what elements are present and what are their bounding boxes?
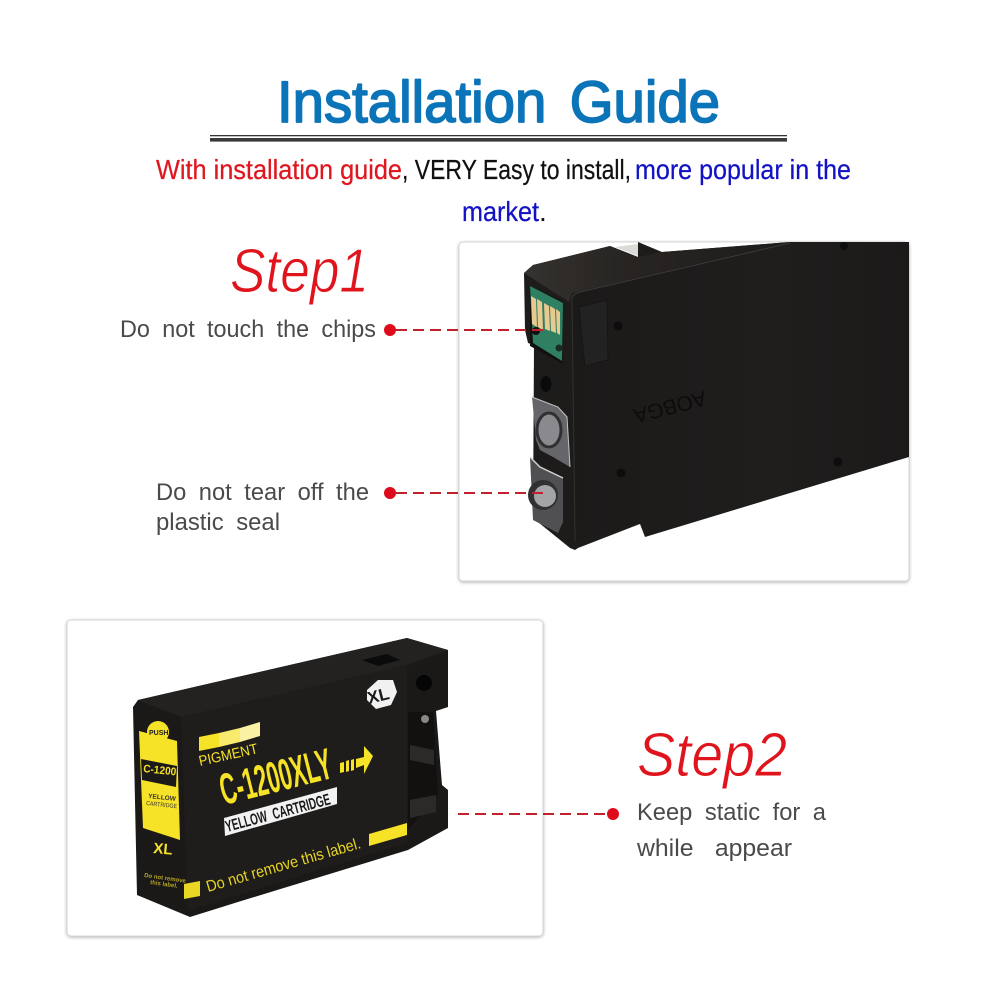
embossed code: AOBGA [631,386,709,427]
side label: XL [153,840,173,859]
side label: CARTRIDGE [146,801,177,810]
side label [139,721,187,890]
heading: step 2: Step2 [637,721,787,790]
icon: yellow cartridge front view [133,638,448,917]
callout arrow: seal [384,487,545,499]
icon: yellow cartridge front view: PIGMENT [197,741,260,770]
subtitle: . [539,196,547,227]
side label: YELLOW [148,793,177,803]
subtitle: With installation guide [156,154,402,185]
text: do not tear off the plastic seal: plastic seal [156,509,280,536]
pigment swatches [199,722,260,751]
plastic seal lower [528,457,563,533]
xl badge: XL [365,684,391,708]
subtitle: market [462,196,539,227]
side label: C-1200 [143,763,177,778]
side label: Do not remove [144,873,187,885]
label: yellow cartridge [224,787,337,836]
panel: step 2 photo [67,620,543,936]
hole [540,376,552,392]
chip [530,286,563,364]
title: Installation Guide [277,70,720,135]
side label: PUSH [149,730,168,737]
subtitle: more popular in the [635,154,851,185]
side label: this label. [150,880,178,890]
title underline [210,135,787,142]
screw dimples [614,242,848,478]
label: yellow cartridge: YELLOW CARTRIDGE [224,791,333,836]
panel: step 1 photo [459,242,909,581]
text: do not tear off the plastic seal: Do not tear off the [156,479,369,506]
text: keep static [636,799,827,862]
text: do not tear off the plastic seal [156,479,369,536]
icon: black cartridge rear view [524,242,909,550]
plastic seal upper [532,397,570,467]
xl badge [365,680,397,709]
heading: step 1: Step1 [230,237,369,306]
text: keep static: Keep static for a [637,799,827,826]
model number: C-1200XLY [215,740,337,815]
callout arrow: step 2 [458,808,619,820]
subtitle: , VERY Easy to install, [402,154,631,185]
subtitle [156,154,851,227]
icon: arrow [340,746,373,774]
callout arrow: chips [384,324,545,336]
warning line: Do not remove this label. [204,835,363,896]
text: do not touch the chips: Do not touch the chips [120,316,376,343]
text: keep static: while appear [636,835,792,862]
